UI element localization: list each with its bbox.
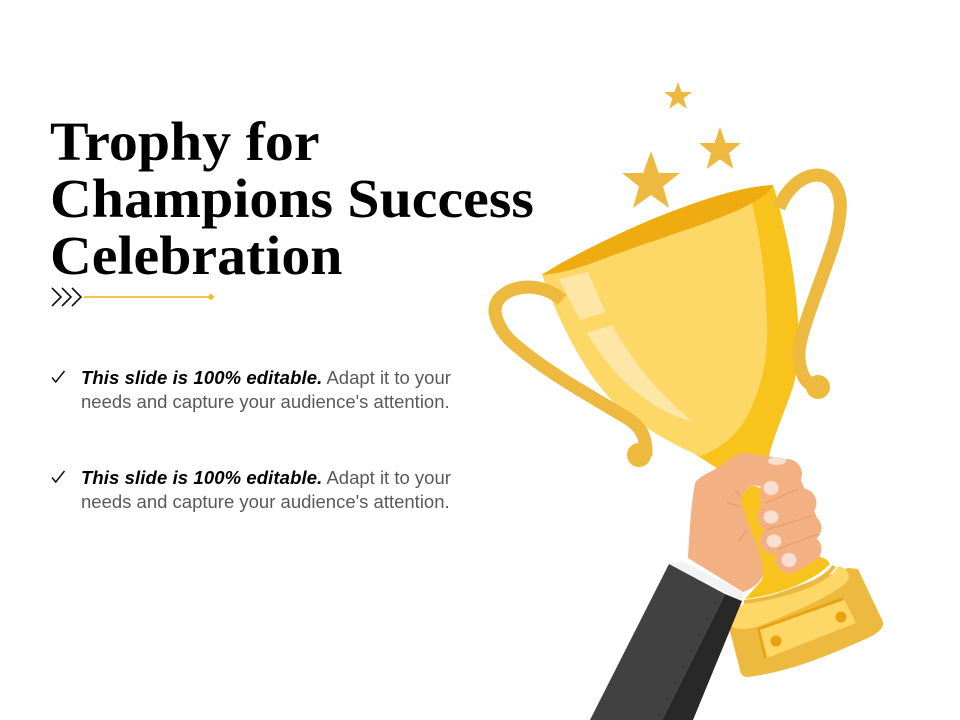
title [50, 111, 534, 286]
stars [622, 82, 741, 208]
icon: check mark [52, 470, 65, 484]
hand [688, 453, 818, 592]
title: Champions Success [50, 168, 534, 229]
icon: check mark [52, 370, 65, 384]
title: Trophy for [50, 111, 320, 172]
bullet 1 text: needs and capture your audience's attention. [81, 391, 450, 412]
title: Celebration [50, 225, 342, 286]
trophy handle: right [779, 175, 840, 399]
bullet 2 [52, 467, 451, 512]
bullet 2 text: This slide is 100% editable. Adapt it to your [81, 467, 451, 488]
trophy cup [542, 185, 799, 472]
sleeve and cuff [590, 561, 743, 720]
bullet 1 text: This slide is 100% editable. Adapt it to your [81, 367, 451, 388]
title underline with chevrons [52, 287, 214, 307]
bullet 2 text: needs and capture your audience's attention. [81, 491, 450, 512]
trophy stem and base [727, 485, 883, 677]
bullet 1 text [81, 367, 451, 412]
bullet 1 [52, 367, 451, 412]
bullet 2 text [81, 467, 451, 512]
trophy handle: left [495, 287, 651, 467]
